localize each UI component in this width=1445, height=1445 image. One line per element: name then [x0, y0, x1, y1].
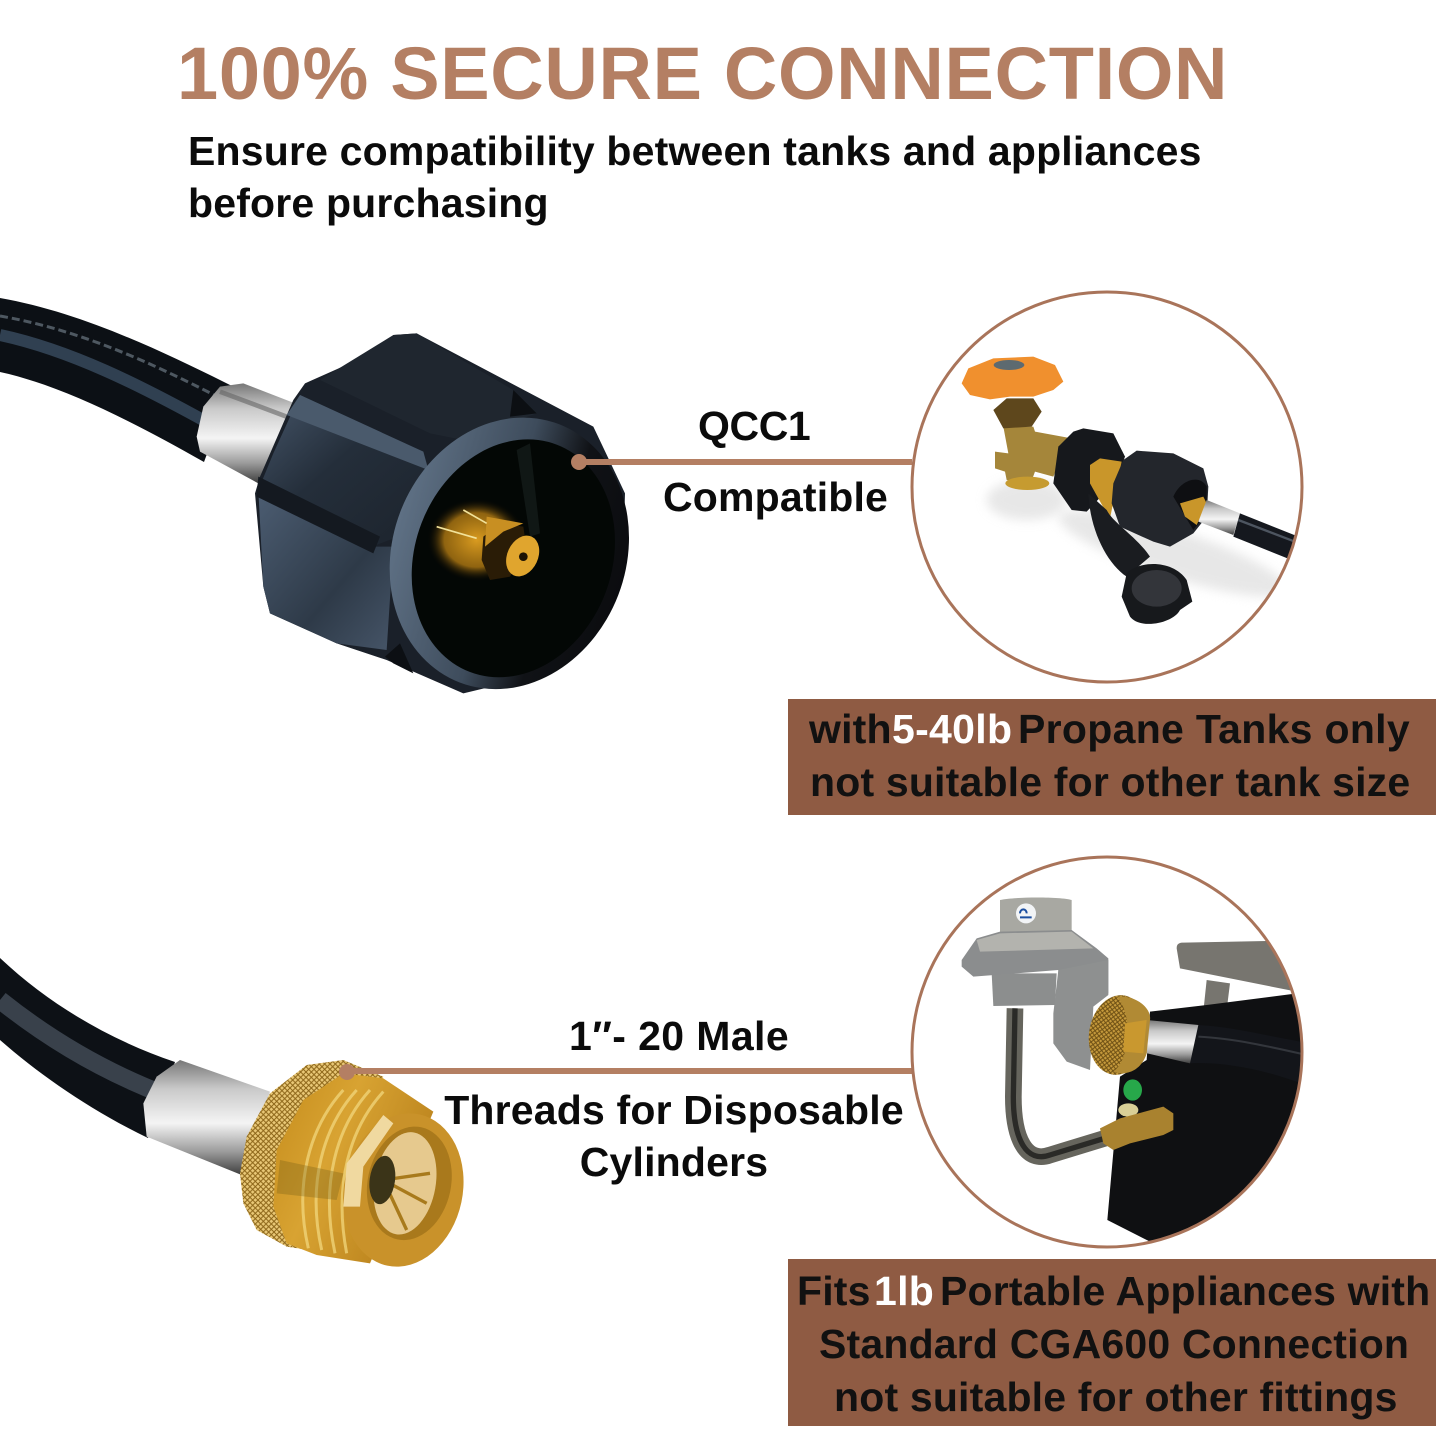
- callout: 1lb appliances: Standard CGA600 Connection: [819, 1321, 1409, 1367]
- photo: 1 inch male brass fitting and hose: [0, 958, 477, 1278]
- regulator flange: [962, 930, 1108, 994]
- callout: 1lb appliances: [788, 1259, 1436, 1426]
- threads: [303, 1090, 383, 1253]
- connector line: QCC1: [571, 454, 912, 470]
- ferrule: [1146, 1020, 1198, 1064]
- nut interior: [378, 410, 649, 707]
- callout: 1lb appliances: Portable Appliances with: [940, 1268, 1430, 1314]
- callout: 5-40lb tanks: [788, 699, 1436, 815]
- photo: QCC1 hose and nut: [0, 298, 668, 724]
- hex nut: [993, 398, 1042, 428]
- bore hole: [366, 1154, 398, 1206]
- label: Compatible: Compatible: [663, 474, 888, 520]
- label: 1 inch 20 male: 1″- 20 Male: [569, 1013, 789, 1059]
- regulator cap: [1000, 897, 1072, 933]
- subtitle: [188, 128, 1202, 226]
- brass connector: [1090, 458, 1122, 518]
- elbow: [1053, 960, 1108, 1070]
- collar: [273, 1073, 433, 1263]
- hose: [0, 958, 175, 1138]
- title: 100% SECURE CONNECTION: [177, 32, 1228, 115]
- orange handle: [962, 357, 1063, 399]
- circle photo: tank valve: [912, 292, 1302, 682]
- grey bracket: [1177, 941, 1297, 992]
- black nut: [1112, 451, 1208, 547]
- cap: [1122, 564, 1192, 624]
- callout: 1lb appliances: 1lb: [874, 1268, 934, 1314]
- block: [992, 973, 1057, 1006]
- brass fitting: [1100, 1107, 1173, 1150]
- knurled ring: [240, 1060, 383, 1253]
- hose: [1190, 1025, 1310, 1087]
- brass knob: [1088, 995, 1133, 1075]
- callout: 5-40lb tanks: Propane Tanks only: [1018, 706, 1410, 752]
- hose: [0, 298, 232, 462]
- callout: 1lb appliances: not suitable for other fittings: [834, 1374, 1398, 1420]
- callout: 5-40lb tanks: with: [809, 706, 892, 752]
- strap: [1090, 501, 1150, 576]
- inner cone: [366, 1127, 444, 1240]
- black box: [1107, 992, 1310, 1242]
- subtitle: before purchasing: [188, 180, 549, 226]
- callout: 5-40lb tanks: 5-40lb: [892, 706, 1012, 752]
- label: threads for disposable cylinders: Threads for Disposable: [444, 1087, 904, 1133]
- nut body: [255, 333, 625, 693]
- callout: 1lb appliances: Fits: [797, 1268, 871, 1314]
- subtitle: Ensure compatibility between tanks and appliances: [188, 128, 1202, 174]
- tube: [1013, 1008, 1110, 1157]
- brass pin: [427, 498, 527, 582]
- label: threads for disposable cylinders: [444, 1087, 904, 1185]
- circle photo: regulator and burner: [912, 857, 1310, 1247]
- brass fitting: [1180, 497, 1207, 525]
- ferrule: [143, 1060, 270, 1175]
- connector line: 1 inch male: [339, 1064, 912, 1080]
- callout: 5-40lb tanks: not suitable for other tank size: [810, 759, 1410, 805]
- face ring: [329, 1102, 477, 1278]
- LED: [1123, 1079, 1142, 1101]
- label: threads for disposable cylinders: Cylinders: [580, 1139, 768, 1185]
- label: QCC1: QCC1: [698, 403, 810, 449]
- ferrule: [1198, 500, 1240, 535]
- valve body: [995, 426, 1068, 480]
- hose: [1233, 513, 1298, 559]
- black wheel: [1053, 428, 1125, 512]
- ferrule: [197, 383, 295, 483]
- nut rim: [351, 382, 668, 724]
